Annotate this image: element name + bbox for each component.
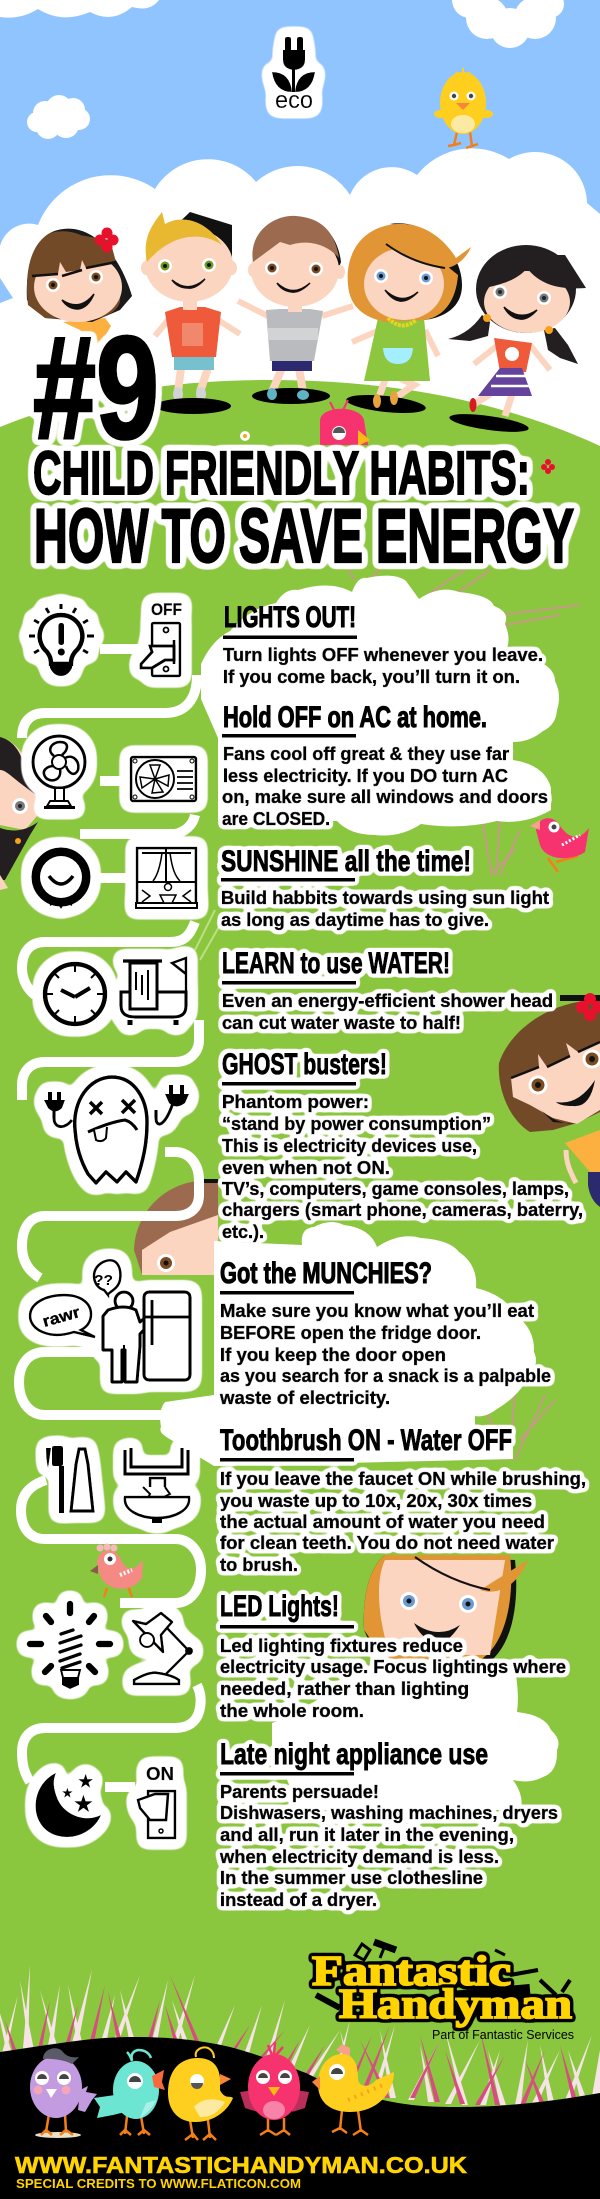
body text: for clean teeth. You do not need water (220, 1532, 554, 1553)
body text (220, 1468, 586, 1575)
logo word: Handyman: Handyman (339, 1982, 572, 2028)
icon: eco plug: eco (275, 87, 313, 114)
body text (222, 743, 548, 829)
icon: moon and stars: ★ (78, 1772, 94, 1791)
body text: Phantom power: (222, 1091, 369, 1112)
icon: ghost with plugs (44, 1077, 189, 1183)
cloud: top left (0, 0, 159, 18)
heading: LED Lights! (220, 1590, 339, 1623)
icon: window (136, 848, 197, 908)
icon: switch ON (138, 1764, 175, 1838)
body text: If you keep the door open (220, 1344, 446, 1365)
section: water (222, 947, 553, 1033)
salmon bird (90, 1544, 143, 1597)
heading: LEARN to use WATER! (222, 947, 450, 980)
icon: switch ON: ON (146, 1764, 174, 1784)
white cloud: lights and AC (201, 576, 559, 836)
icon: switch OFF: OFF (151, 601, 182, 619)
body text: waste of electricity. (219, 1387, 390, 1408)
body text (222, 1091, 583, 1242)
heading: Late night appliance use (220, 1738, 488, 1771)
main title number: #9 (33, 306, 159, 469)
body text: instead of a dryer. (220, 1889, 377, 1910)
connector path (19, 649, 201, 1787)
body text: the whole room. (220, 1700, 364, 1721)
icon: sun (32, 847, 90, 909)
body text: needed, rather than lighting (220, 1678, 469, 1699)
icon: light bulb with exclamation (29, 604, 94, 676)
white cloud: LED and late night (272, 1660, 559, 1810)
pink bird on hill (320, 400, 370, 446)
white cloud: munchies and toothbrush (160, 1222, 536, 1466)
cloud: top right (452, 0, 564, 48)
body text: Parents persuade! (220, 1781, 379, 1802)
body text: If you come back, you’ll turn it on. (223, 666, 520, 687)
underline (222, 734, 356, 738)
icon: eco plug (272, 37, 315, 114)
heading: Hold OFF on AC at home. (223, 701, 487, 734)
body text: This is electricity devices use, (222, 1135, 477, 1156)
peeking child: brown-haired boy (134, 1180, 218, 1275)
icon: bathtub (121, 958, 186, 1025)
body text: even when not ON. (222, 1157, 390, 1178)
body text: Fans cool off great & they use far (223, 743, 509, 764)
icon: desk lamp (133, 1613, 193, 1684)
body text (223, 644, 543, 687)
underline (222, 1082, 356, 1086)
body text: Led lighting fixtures reduce (220, 1635, 463, 1656)
icon: fridge and person: rawr (41, 1304, 82, 1331)
section: LED lights (220, 1590, 566, 1721)
body text: In the summer use clothesline (220, 1867, 483, 1888)
bird: purple (30, 2048, 97, 2138)
bird: teal (94, 2050, 165, 2135)
icon: clock (45, 964, 105, 1024)
bird: yellow-orange (312, 2044, 394, 2135)
child: orange-haired girl (345, 223, 471, 416)
big cloud behind children (0, 148, 600, 470)
logo tools (316, 1942, 570, 2008)
underline (220, 1625, 354, 1628)
heading: Got the MUNCHIES? (220, 1257, 432, 1290)
section: sunshine (221, 845, 549, 930)
heading: LIGHTS OUT! (224, 601, 356, 634)
sky background (0, 0, 600, 500)
section: late night (219, 1738, 558, 1910)
icon: moon and stars: ★ (74, 1793, 93, 1816)
section: lights out (223, 601, 543, 687)
child: brown-haired boy (238, 216, 353, 404)
icon: air conditioner (131, 757, 196, 801)
body text (222, 990, 553, 1033)
heading: Toothbrush ON - Water OFF (220, 1424, 512, 1457)
body text: are CLOSED. (222, 808, 330, 829)
body text: on, make sure all windows and doors (222, 786, 548, 807)
body text: Dishwasers, washing machines, dryers (220, 1802, 558, 1823)
bird: pink (240, 2042, 309, 2135)
icon: toothbrush and paste (46, 1446, 93, 1513)
section: toothbrush (220, 1424, 586, 1575)
icon: moon and stars (36, 1772, 101, 1837)
heading: SUNSHINE all the time! (221, 845, 471, 878)
peeking child: black-haired girl left (0, 737, 38, 890)
underline (221, 878, 355, 882)
logo word: Fantastic: Fantastic (312, 1949, 511, 1995)
body text: as long as daytime has to give. (221, 909, 489, 930)
peeking child: brown-haired girl right (499, 993, 600, 1207)
flowers on hill (240, 431, 555, 474)
icon: sink with faucet (125, 1448, 189, 1523)
body text (219, 1300, 551, 1408)
body text: the actual amount of water you need (220, 1511, 545, 1532)
body text: Turn lights OFF whenever you leave. (223, 644, 543, 665)
section: munchies (219, 1257, 551, 1408)
child: brown-haired girl (27, 228, 132, 348)
body text: and all, run it later in the evening, (220, 1824, 514, 1845)
body text: Build habbits towards using sun light (221, 887, 549, 908)
icon: moon and stars: ★ (62, 1786, 73, 1800)
grass blades behind clouds (195, 563, 580, 1460)
body text: “stand by power consumption” (222, 1113, 491, 1134)
body text (219, 1781, 558, 1910)
body text: Make sure you know what you’ll eat (220, 1300, 534, 1321)
credits line: SPECIAL CREDITS TO WWW.FLATICON.COM (16, 2177, 301, 2191)
cloud: small left (27, 95, 90, 139)
peeking child: orange-haired girl (364, 1555, 528, 1665)
underline (220, 1458, 354, 1462)
logo: Fantastic Handyman (312, 1942, 574, 2042)
body text: If you leave the faucet ON while brushing, (220, 1468, 586, 1489)
icon: fan (33, 736, 85, 809)
body text: electricity usage. Focus lightings where (220, 1656, 566, 1677)
underline (220, 1772, 354, 1776)
pink bird right (530, 818, 589, 872)
underline (222, 981, 356, 984)
heading: GHOST busters! (222, 1048, 387, 1081)
yellow chick (434, 68, 493, 148)
icon: fridge and person: ?? (94, 1272, 113, 1289)
grass tufts (0, 1965, 600, 2105)
body text: Even an energy-efficient shower head (222, 990, 553, 1011)
body text: can cut water waste to half! (222, 1012, 461, 1033)
website url: WWW.FANTASTICHANDYMAN.CO.UK (15, 2152, 467, 2178)
bird: yellow (168, 2047, 233, 2140)
body text: BEFORE open the fridge door. (220, 1322, 481, 1343)
body text: to brush. (220, 1554, 298, 1575)
section: ghost busters (222, 1048, 583, 1242)
underline (220, 1291, 354, 1294)
icon: switch OFF (141, 601, 182, 676)
section: AC (222, 701, 548, 829)
body text: as you search for a snack is a palpable (220, 1365, 551, 1386)
child: blond boy (141, 212, 240, 414)
body text: you waste up to 10x, 20x, 30x times (220, 1490, 532, 1511)
icon: fridge and person (30, 1260, 190, 1382)
child: black-haired girl (448, 245, 586, 435)
black ground (0, 2037, 600, 2199)
underline (223, 636, 357, 639)
body text: less electricity. If you DO turn AC (223, 765, 508, 786)
body text: when electricity demand is less. (219, 1846, 499, 1867)
body text (220, 1635, 566, 1721)
body text: TV’s, computers, game consoles, lamps, (222, 1178, 569, 1199)
body text: chargers (smart phone, cameras, baterry, (222, 1199, 583, 1220)
body text: etc.). (222, 1221, 264, 1242)
icon: LED bulb (30, 1604, 110, 1689)
body text (221, 887, 549, 930)
logo tagline: Part of Fantastic Services (432, 2028, 574, 2042)
